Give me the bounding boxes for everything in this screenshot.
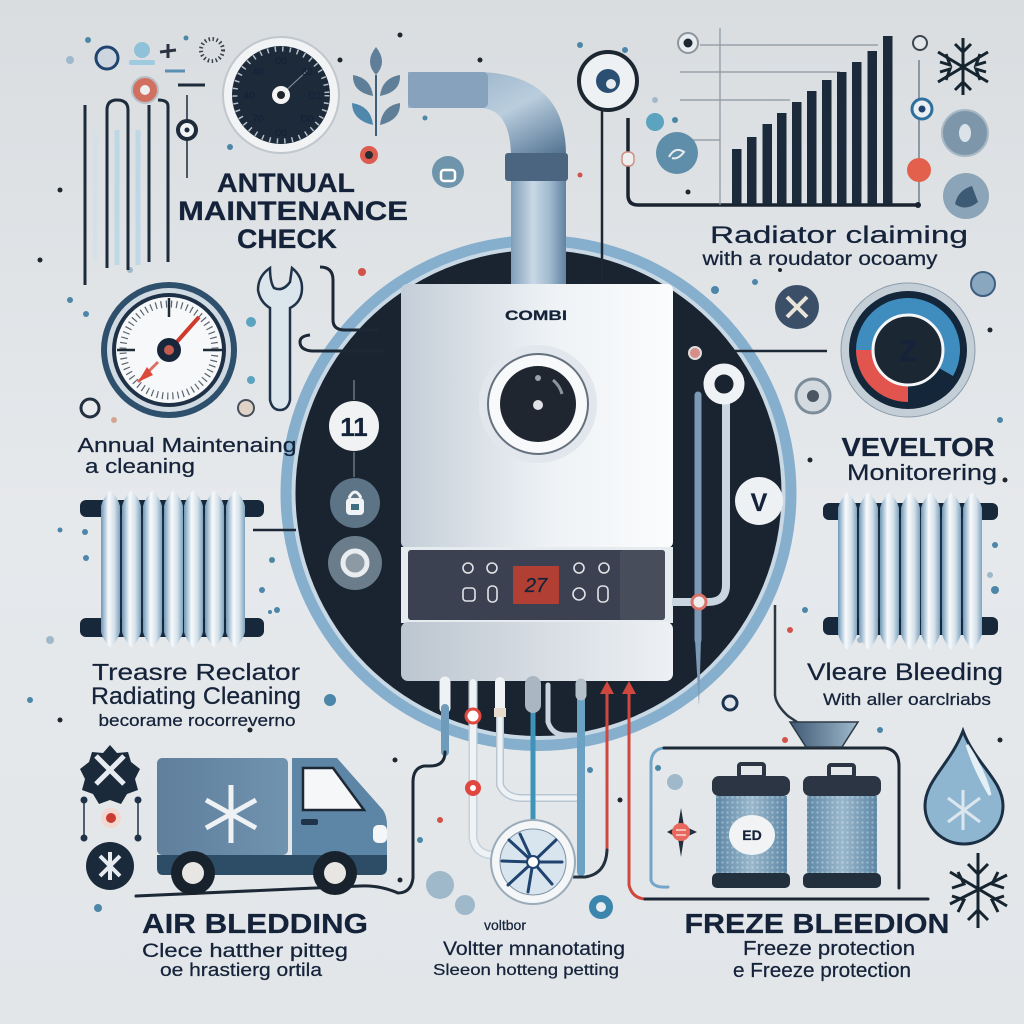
- control panel: 27: [524, 575, 548, 597]
- right vertical line above circle: [601, 110, 603, 280]
- text: annual maintenance cleaning: [78, 435, 296, 478]
- pipes under boiler: [136, 682, 928, 899]
- icon: filter canisters: [712, 764, 881, 888]
- icon: water drop: [925, 731, 1003, 844]
- icon: top gauge: 70: [252, 114, 264, 125]
- badge: lock: [330, 478, 380, 528]
- icon: red marker with dark centre: [360, 146, 378, 164]
- icon: bottom snowflake: [950, 853, 1007, 928]
- text: radiator cleaning: Treasre Reclator: [92, 659, 300, 685]
- text: voltor monitoring: voltbor: [484, 917, 526, 933]
- icon: leaf sprig: [352, 47, 400, 136]
- text: freeze bleeding: e Freeze protection: [733, 960, 911, 982]
- fan: [491, 820, 575, 904]
- red pipe tips: [600, 681, 636, 694]
- text: voltor monitoring: [433, 917, 625, 979]
- heading: annual maintenance check: ANTNUAL: [217, 168, 355, 198]
- text: air bleeding: Clece hatther pitteg: [142, 941, 348, 962]
- icon: wrench: [258, 268, 302, 410]
- heading: annual maintenance check: [178, 168, 408, 254]
- text: vevelor monitoring: [842, 432, 997, 485]
- flue pipe: [408, 72, 568, 284]
- canister left: [712, 764, 790, 888]
- icon: top centre ring dial: [579, 33, 698, 174]
- red valves: [465, 708, 506, 796]
- canister left: ED: [742, 827, 762, 843]
- left radiator: [80, 490, 264, 648]
- icons on dark circle: [328, 347, 783, 710]
- connector line to right gauge: [735, 350, 827, 352]
- text: radiator cleaning: Radiating Cleaning: [91, 683, 301, 710]
- badge: V: V: [751, 489, 768, 517]
- icon: top-left heating coil: [85, 85, 205, 285]
- right radiator: [823, 492, 998, 650]
- text: voltor monitoring: Voltter mnanotating: [443, 939, 625, 960]
- heading: annual maintenance check: CHECK: [237, 224, 338, 254]
- icon: small ring valves: [96, 39, 223, 139]
- badge: 11: [329, 401, 379, 451]
- text: valve bleeding: [807, 659, 1003, 709]
- text: freeze bleeding: FREZE BLEEDION: [684, 908, 950, 939]
- right gauge: [841, 283, 975, 417]
- left gauge: [101, 282, 237, 418]
- icon: lock badge: [432, 156, 464, 188]
- icon: small red S badge: [667, 808, 697, 857]
- badge: V: [735, 477, 783, 525]
- combi boiler unit: [401, 284, 673, 681]
- icon: right blue circles: [942, 110, 989, 219]
- pipe hook beside wrench: [300, 267, 384, 351]
- text: voltor monitoring: Sleeon hotteng petting: [433, 962, 619, 979]
- heading: annual maintenance check: MAINTENANCE: [178, 196, 408, 226]
- ring marker: [723, 696, 737, 710]
- text: radiator cleaning top right: [701, 222, 968, 270]
- badge: ring: [328, 536, 382, 590]
- icon: top gauge: 40: [243, 91, 255, 102]
- icon: small X badge: [775, 272, 995, 413]
- text: radiator cleaning top right: Radiator claiming: [710, 222, 968, 249]
- icon: top gauge: D1: [309, 91, 322, 102]
- icon: right markers on chart: [907, 36, 932, 182]
- icon: top gauge: [223, 37, 339, 153]
- icon: top gauge: 00: [275, 128, 287, 139]
- boiler label: COMBI: [505, 307, 567, 323]
- canister right: [803, 765, 881, 888]
- control panel: [401, 547, 673, 623]
- small icons near left gauge: [81, 317, 256, 423]
- boiler dial: [479, 345, 597, 463]
- text: freeze bleeding: Freeze protection: [743, 938, 915, 960]
- text: annual maintenance cleaning: Annual Maintenaing: [78, 435, 296, 457]
- line from left radiator to circle: [253, 529, 296, 531]
- panel: central dark circle with blue ring: [280, 235, 796, 751]
- icon: top gauge: 00: [275, 56, 287, 67]
- icon: snow badges: [80, 745, 142, 890]
- text: annual maintenance cleaning: a cleaning: [85, 456, 195, 478]
- text: vevelor monitoring: Monitorering: [847, 460, 997, 485]
- right gauge: Z: [899, 335, 917, 368]
- text: valve bleeding: With aller oarclriabs: [823, 690, 991, 709]
- text: air bleeding: [142, 908, 368, 980]
- icon: service van: [157, 758, 387, 895]
- text: air bleeding: oe hrastierg ortila: [160, 960, 323, 980]
- text: air bleeding: AIR BLEDDING: [142, 908, 368, 939]
- icon: right top snowflake: [938, 38, 988, 95]
- top-right bar chart: [628, 28, 921, 208]
- text: valve bleeding: Vleare Bleeding: [807, 659, 1003, 686]
- icon: scoop funnel: [775, 605, 858, 747]
- icon: small teal dot badge: [589, 895, 613, 919]
- icon: top gauge: 60: [301, 67, 313, 78]
- badge: 11: 11: [340, 412, 368, 442]
- icon: top gauge: 40: [252, 67, 264, 78]
- text: radiator cleaning: [91, 659, 301, 730]
- text: vevelor monitoring: VEVELTOR: [842, 432, 995, 462]
- text: radiator cleaning top right: with a roudator ocoamy: [701, 249, 938, 270]
- text: freeze bleeding: [684, 908, 950, 982]
- right pipe with valve on dark circle: [672, 369, 739, 706]
- text: radiator cleaning: becorame rocorreverno: [98, 711, 296, 730]
- icon: top gauge: D0: [301, 114, 314, 125]
